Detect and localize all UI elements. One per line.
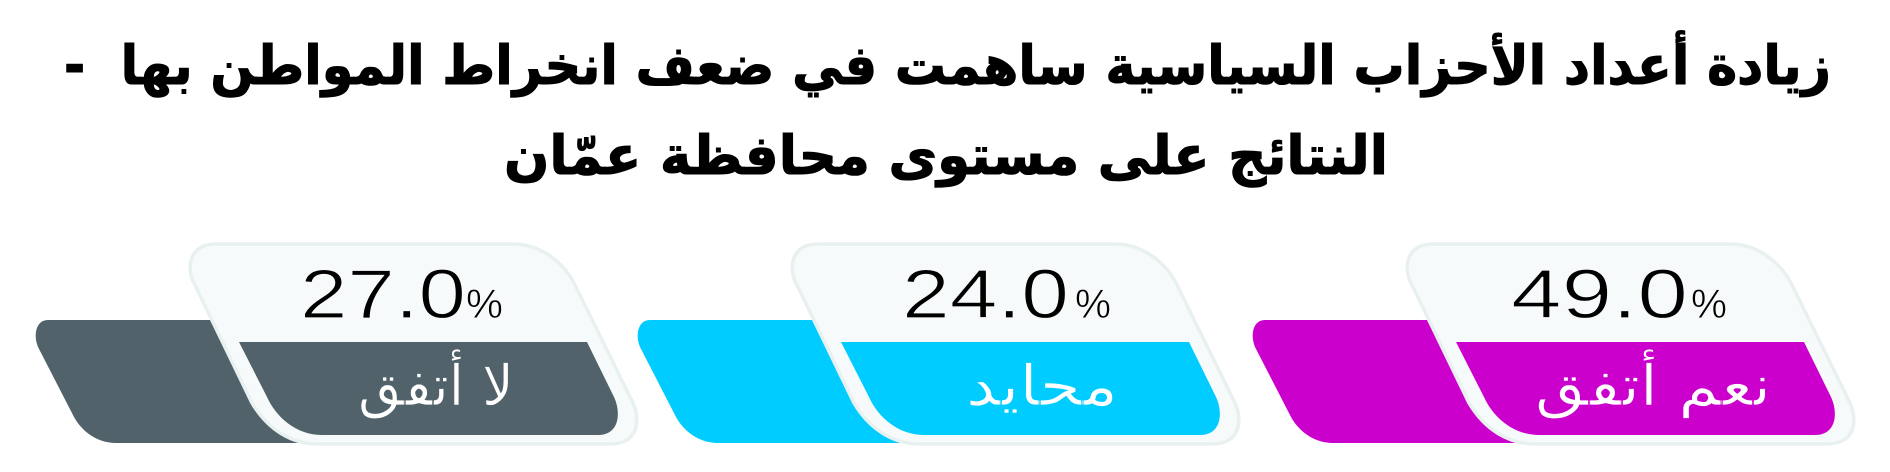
back shape: [36, 320, 303, 443]
percentage value: 49.0: [1511, 255, 1688, 333]
front panel: [792, 244, 1239, 444]
label band: [841, 342, 1220, 435]
back shape: [1253, 320, 1520, 443]
label band: [1456, 342, 1835, 435]
percent sign: %: [1691, 281, 1727, 327]
card: agree 49.0%: [1253, 244, 1854, 444]
card: neutral 24.0%: [638, 244, 1239, 444]
label band: [239, 342, 618, 435]
percent sign: %: [466, 281, 503, 327]
title line 2: النتائج على مستوى محافظة عمّان: [504, 124, 1388, 187]
label text: محايد: [966, 354, 1118, 419]
front panel: [1407, 244, 1854, 444]
percentage value: 24.0: [902, 255, 1069, 333]
back shape: [638, 320, 905, 443]
percentage value: 27.0: [300, 255, 466, 333]
card: disagree 27.0%: [36, 244, 637, 444]
label text: لا أتفق: [358, 349, 514, 419]
title: [64, 30, 1831, 187]
percent sign: %: [1075, 281, 1111, 327]
title line 1: زيادة أعداد الأحزاب السياسية ساهمت في ضعف انخراط المواطن بها -: [64, 30, 1831, 97]
label text: نعم أتفق: [1535, 349, 1771, 419]
front panel: [190, 244, 637, 444]
